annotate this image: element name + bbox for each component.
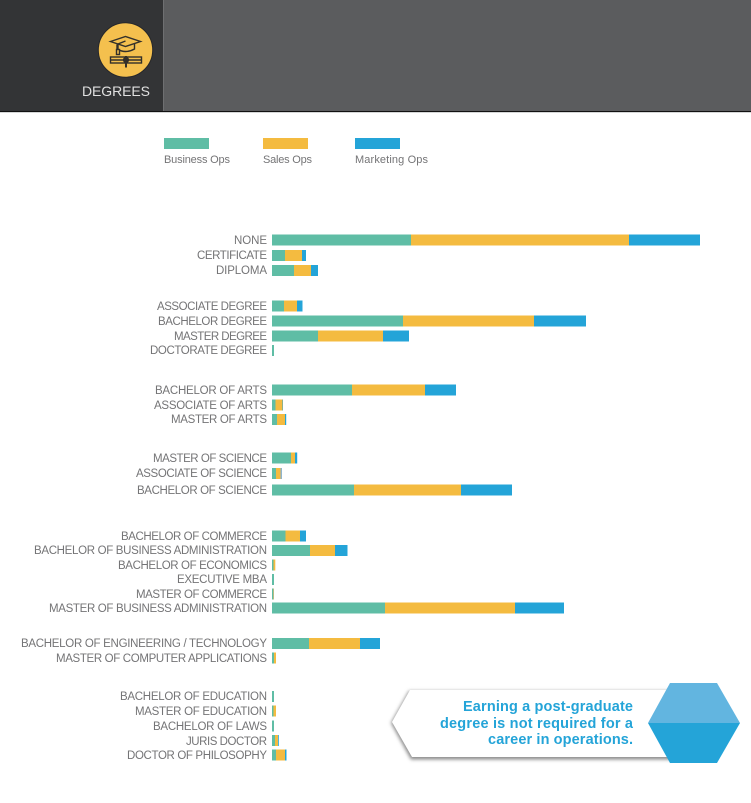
row: diploma: DIPLOMA: [216, 265, 267, 277]
legend: [164, 138, 428, 166]
bar chart: degrees by operations role: [21, 234, 700, 762]
row: none: NONE: [234, 235, 267, 247]
row: master of commerce: MASTER OF COMMERCE: [136, 589, 267, 601]
row: master of business administration: [49, 602, 564, 615]
group: general qualifications: [197, 234, 700, 277]
group: technology: [21, 638, 380, 665]
row: doctorate degree: DOCTORATE DEGREE: [150, 345, 267, 357]
row: master degree: MASTER DEGREE: [174, 331, 267, 343]
row: bachelor of arts: BACHELOR OF ARTS: [155, 385, 267, 397]
row: bachelor of science: BACHELOR OF SCIENCE: [137, 485, 267, 497]
callout: post-graduate degree: [391, 683, 740, 763]
group: business: [34, 530, 564, 615]
group: professional and doctoral: [120, 691, 286, 762]
callout text: degree is not required for a: [440, 716, 634, 732]
legend item: business ops: Business Ops: [164, 154, 230, 166]
row: bachelor of arts: [155, 384, 456, 397]
callout text: [440, 699, 634, 748]
group: science: [136, 452, 512, 497]
row: master degree: [174, 330, 409, 343]
row: master of business administration: MASTER OF BUSINESS ADMINISTRATION: [49, 603, 267, 615]
row: associate degree: ASSOCIATE DEGREE: [157, 301, 267, 313]
legend item: marketing ops: [355, 138, 428, 166]
group: degree level: [150, 300, 586, 357]
row: certificate: [197, 250, 306, 262]
group: arts: [154, 384, 456, 426]
heading: degrees: DEGREES: [82, 83, 150, 99]
icon: graduation cap and diploma: [98, 23, 153, 77]
legend item: business ops: [164, 138, 230, 166]
header band: [0, 0, 751, 113]
callout text: career in operations.: [488, 732, 633, 748]
row: master of computer applications: MASTER OF COMPUTER APPLICATIONS: [56, 653, 267, 665]
row: bachelor of business administration: BACHELOR OF BUSINESS ADMINISTRATION: [34, 545, 267, 557]
row: bachelor of engineering / technology: [21, 638, 380, 650]
row: certificate: CERTIFICATE: [197, 250, 267, 262]
legend item: sales ops: Sales Ops: [263, 154, 312, 166]
row: bachelor of education: BACHELOR OF EDUCATION: [120, 691, 267, 703]
row: bachelor of engineering / technology: BACHELOR OF ENGINEERING / TECHNOLOGY: [21, 638, 267, 650]
row: bachelor of economics: BACHELOR OF ECONOMICS: [118, 560, 267, 572]
row: doctor of philosophy: DOCTOR OF PHILOSOPHY: [127, 750, 267, 762]
row: master of science: MASTER OF SCIENCE: [153, 453, 267, 465]
callout text: Earning a post-graduate: [463, 699, 633, 715]
icon: hexagon: [648, 683, 740, 763]
row: diploma: [216, 265, 318, 277]
legend item: marketing ops: Marketing Ops: [355, 154, 428, 166]
row: master of education: MASTER OF EDUCATION: [135, 706, 267, 718]
row: bachelor degree: [158, 316, 586, 328]
row: bachelor of science: [137, 484, 512, 497]
legend item: sales ops: [263, 138, 312, 166]
row: juris doctor: JURIS DOCTOR: [186, 736, 267, 748]
row: none: [234, 234, 700, 247]
row: master of arts: MASTER OF ARTS: [171, 414, 267, 426]
row: associate of arts: ASSOCIATE OF ARTS: [154, 400, 267, 412]
row: associate of science: ASSOCIATE OF SCIENCE: [136, 468, 267, 480]
row: bachelor of commerce: BACHELOR OF COMMERCE: [121, 531, 267, 543]
row: bachelor degree: BACHELOR DEGREE: [158, 316, 267, 328]
row: executive mba: EXECUTIVE MBA: [177, 574, 267, 586]
row: bachelor of laws: BACHELOR OF LAWS: [153, 721, 267, 733]
